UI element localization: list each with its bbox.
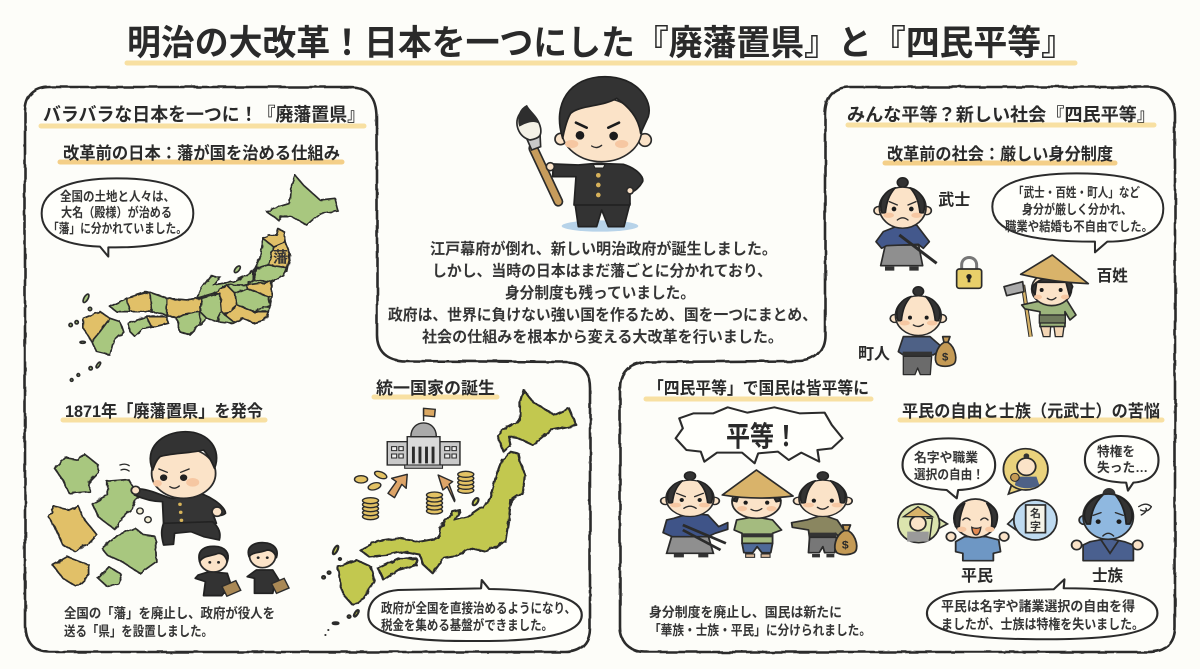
callout: 平等！: 平等！ (726, 421, 798, 452)
illustration: 手をつなぐ三人 (661, 470, 857, 557)
illustration: 武士・百姓・町人 (874, 178, 1128, 375)
subheading: 改革前の日本: 改革前の日本：藩が国を治める仕組み (63, 143, 340, 163)
subheading: 四民平等で国民は皆平等に: 「四民平等」で国民は皆平等に (648, 378, 869, 398)
character: 武士 (661, 472, 728, 557)
character: 平民 (946, 499, 1009, 561)
character: 武士 (874, 178, 937, 271)
callout: 特権を失った: 特権を (1097, 444, 1135, 459)
callout: 平民は名字や (927, 579, 1157, 639)
heading: みんな平等: みんな平等？新しい社会『四民平等』 (847, 104, 1155, 125)
illustration: 国会議事堂と税金 (355, 408, 474, 520)
callout: 名字や職業選択の自由: 選択の自由！ (914, 467, 984, 482)
text: 身分制度を廃止: 「華族・士族・平民」に分けられました。 (649, 622, 871, 638)
label: 武士: 武士 (938, 191, 970, 209)
icon: 商人の円 (1003, 449, 1048, 494)
map: 統一された日本 (322, 390, 576, 636)
heading: バラバラな日本を一つに: バラバラな日本を一つに！『廃藩置県』 (43, 104, 365, 125)
text: $: $ (942, 351, 949, 363)
text: 名字の札: 字 (1030, 519, 1041, 533)
illustration: 廃藩する少年と役人 (48, 432, 289, 596)
label: 平民: 平民 (961, 568, 993, 585)
illustration: 平民 (898, 449, 1151, 561)
callout: 政府が全国を直接治める: 税金を集める基盤ができました。 (381, 617, 553, 633)
text: 身分制度を廃止 (649, 604, 871, 638)
callout: 名字や職業選択の自由 (903, 438, 995, 498)
text: 名字の札 (1030, 506, 1041, 533)
callout: 全国の土地と人々は: 大名（殿様）が治める (61, 205, 172, 220)
callout: 特権を失った: 失った… (1097, 460, 1148, 475)
text: 全国の藩を廃止: 全国の「藩」を廃止し、政府が役人を (64, 605, 275, 621)
callout: 特権を失った (1085, 436, 1158, 491)
icon: 農民の円 (898, 504, 947, 543)
callout: 平民は名字や: 平民は名字や諸業選択の自由を得 (941, 598, 1135, 614)
text: 導入文: 江戸幕府が倒れ、新しい明治政府が誕生しました。 (430, 239, 777, 258)
subheading: 改革前の社会: 改革前の社会：厳しい身分制度 (887, 144, 1113, 164)
text: 全国の藩を廃止: 送る「県」を設置しました。 (64, 623, 213, 639)
callout: 平等！ (676, 407, 843, 463)
character: 士族 (1072, 488, 1151, 561)
callout: 身分制度: 職業や結婚も不自由でした。 (1005, 219, 1153, 234)
icon: 名字の札 (1008, 500, 1057, 540)
panel: 廃藩置県 (25, 87, 590, 652)
text: 導入文: 政府は、世界に負けない強い国を作るため、国を一つにまとめ、 (388, 305, 817, 324)
callout: 政府が全国を直接治める: 政府が全国を直接治めるようになり、 (381, 600, 576, 616)
label: 士族: 士族 (1092, 566, 1123, 585)
character: 町人 (890, 287, 956, 375)
subheading: 平民の自由と士族の苦悩: 平民の自由と士族（元武士）の苦悩 (902, 401, 1160, 421)
text: 名字の札: 名 (1030, 506, 1041, 520)
subheading: 統一国家の誕生: 統一国家の誕生 (376, 378, 495, 398)
callout: 身分制度: 「武士・百姓・町人」など (1013, 185, 1140, 200)
text: 身分制度を廃止: 身分制度を廃止し、国民は新たに (649, 604, 842, 620)
callout: 全国の土地と人々は: 全国の土地と人々は、 (60, 189, 175, 204)
character: 町人 (792, 472, 857, 557)
map: 藩に分かれた日本: 藩 (273, 249, 288, 266)
callout: 政府が全国を直接治める (368, 580, 582, 641)
text: $: $ (842, 539, 849, 551)
title: 明治の大改革！日本を一つにした『廃藩置県』と『四民平等』 (127, 24, 1075, 63)
label: 町人: 町人 (858, 346, 890, 363)
callout: 全国の土地と人々は: 「藩」に分かれていました。 (48, 221, 187, 236)
subheading: 1871年: 1871年「廃藩置県」を発令 (65, 401, 263, 421)
callout: 名字や職業選択の自由: 名字や職業 (914, 450, 978, 465)
label: 百姓: 百姓 (1097, 266, 1128, 285)
character: 百姓 (722, 470, 793, 557)
character: 筆を持つ少年 (517, 77, 651, 232)
callout: 身分制度 (992, 173, 1163, 252)
map: 藩に分かれた日本 (69, 175, 338, 381)
callout: 平民は名字や: ましたが、士族は特権を失いました。 (941, 616, 1144, 632)
text: 全国の藩を廃止 (64, 605, 275, 639)
character: 百姓 (1004, 255, 1088, 337)
panel: 四民平等 (620, 87, 1175, 652)
text: 導入文: しかし、当時の日本はまだ藩ごとに分かれており、 (432, 261, 772, 280)
callout: 全国の土地と人々は (42, 178, 193, 257)
panel: 導入 (388, 77, 817, 346)
callout: 身分制度: 身分が厳しく分かれ、 (1022, 202, 1132, 217)
text: 導入文 (388, 239, 817, 346)
icon: 錠前 (957, 257, 982, 288)
text: 導入文: 社会の仕組みを根本から変える大改革を行いました。 (422, 327, 783, 346)
text: 導入文: 身分制度も残っていました。 (505, 283, 695, 302)
